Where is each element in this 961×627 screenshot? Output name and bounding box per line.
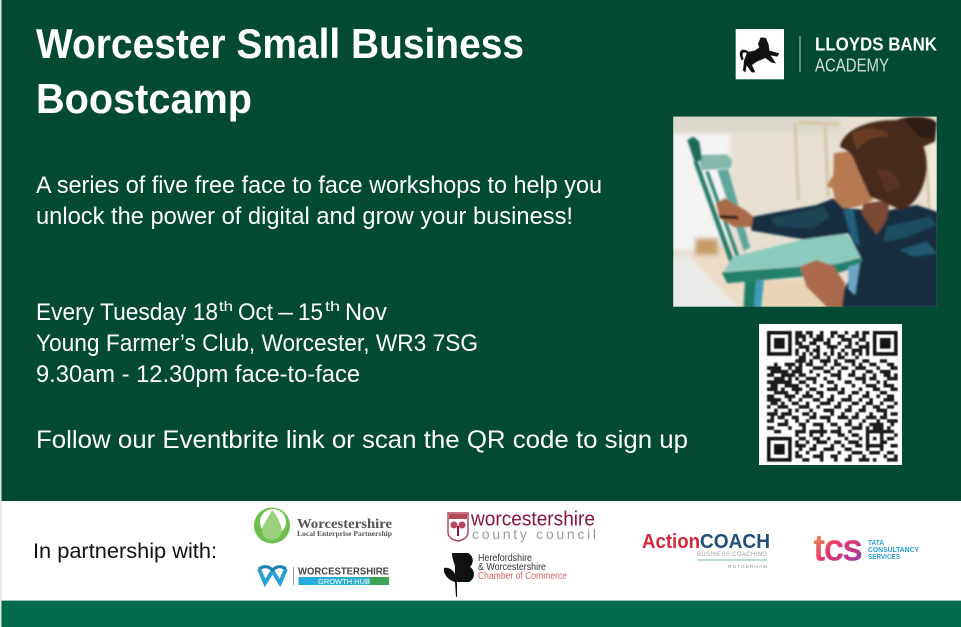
logo: ActionCOACH: ROTHERHAM: [728, 564, 767, 569]
hair: [840, 117, 937, 210]
photo: woman painting a chair: [673, 116, 937, 307]
logo: Worcestershire Growth Hub: [259, 566, 389, 586]
intro text: unlock the power of digital and grow your business!: [36, 203, 573, 230]
event details: 15: [298, 299, 323, 326]
logo: TCS: TATA: [868, 538, 885, 547]
event details: –: [278, 299, 294, 326]
icon: council crest: [448, 513, 468, 541]
event details: 9.30am - 12.30pm face-to-face: [36, 361, 360, 388]
logo: Herefordshire & Worcestershire Chamber of Commerce: & Worcestershire: [478, 562, 546, 573]
event details: Every Tuesday 18: [36, 299, 218, 326]
shirt: [750, 197, 937, 307]
bottom green band: [2, 601, 961, 627]
event details: [36, 298, 478, 388]
background: dark green panel: [0, 0, 961, 501]
logo: Worcestershire LEP: [254, 508, 392, 544]
event details: th: [325, 298, 340, 314]
left edge strip: [0, 0, 2, 627]
title: [36, 20, 524, 122]
event details: Young Farmer’s Club, Worcester, WR3 7SG: [36, 330, 478, 357]
hands: [716, 198, 753, 227]
event details: Nov: [345, 299, 387, 326]
logo: Herefordshire & Worcestershire Chamber of Commerce: Herefordshire: [478, 553, 532, 564]
icon: chamber leaf B: [444, 553, 474, 597]
title: Boostcamp: [36, 75, 252, 122]
logo: TCS: CONSULTANCY: [868, 545, 919, 554]
logo: Worcestershire County Council: [448, 508, 596, 542]
logo: TCS: tcs: [814, 527, 862, 568]
QR finder patterns: [767, 331, 898, 462]
logo: Lloyds Bank Academy: [736, 29, 937, 79]
chair: [748, 244, 752, 248]
logo: Lloyds Bank Academy: LLOYDS BANK: [815, 34, 937, 54]
white partner band: [0, 501, 961, 601]
title: Worcester Small Business: [36, 20, 524, 67]
logo: Worcestershire County Council: worcestershire: [470, 508, 595, 530]
event details: Oct: [238, 299, 273, 326]
intro text: A series of five free face to face workshops to help you: [36, 172, 602, 199]
icon: black horse: [736, 29, 784, 79]
logo: Worcestershire County Council: county council: [472, 526, 596, 542]
logo: Worcestershire Growth Hub: GROWTH HUB: [318, 579, 370, 586]
QR code: [759, 324, 902, 465]
logo: Worcestershire LEP: Local Enterprise Partnership: [297, 529, 392, 538]
logo: Herefordshire & Worcestershire Chamber of Commerce: Chamber of Commerce: [478, 571, 567, 582]
logo: Worcestershire LEP: Worcestershire: [297, 517, 392, 532]
logo: ActionCOACH: Action: [642, 531, 700, 553]
logo: Herefordshire & Worcestershire Chamber of Commerce: [444, 553, 567, 597]
intro text: [36, 172, 602, 230]
logo: ActionCOACH: [642, 531, 770, 569]
neck and face: [862, 200, 890, 235]
event details: th: [219, 298, 233, 314]
partnership label: In partnership with:: [33, 539, 217, 563]
logo: TCS: SERVICES: [868, 552, 900, 561]
logo: Worcestershire Growth Hub: WORCESTERSHIRE: [298, 566, 389, 578]
logo: ActionCOACH: COACH: [700, 531, 770, 553]
logo: Lloyds Bank Academy: ACADEMY: [815, 56, 889, 76]
QR data modules: [767, 333, 898, 460]
call to action: Follow our Eventbrite link or scan the QR code to sign up: [36, 426, 688, 454]
logo: TCS: [814, 527, 919, 568]
logo: ActionCOACH: BUSINESS COACHING: [697, 552, 767, 558]
